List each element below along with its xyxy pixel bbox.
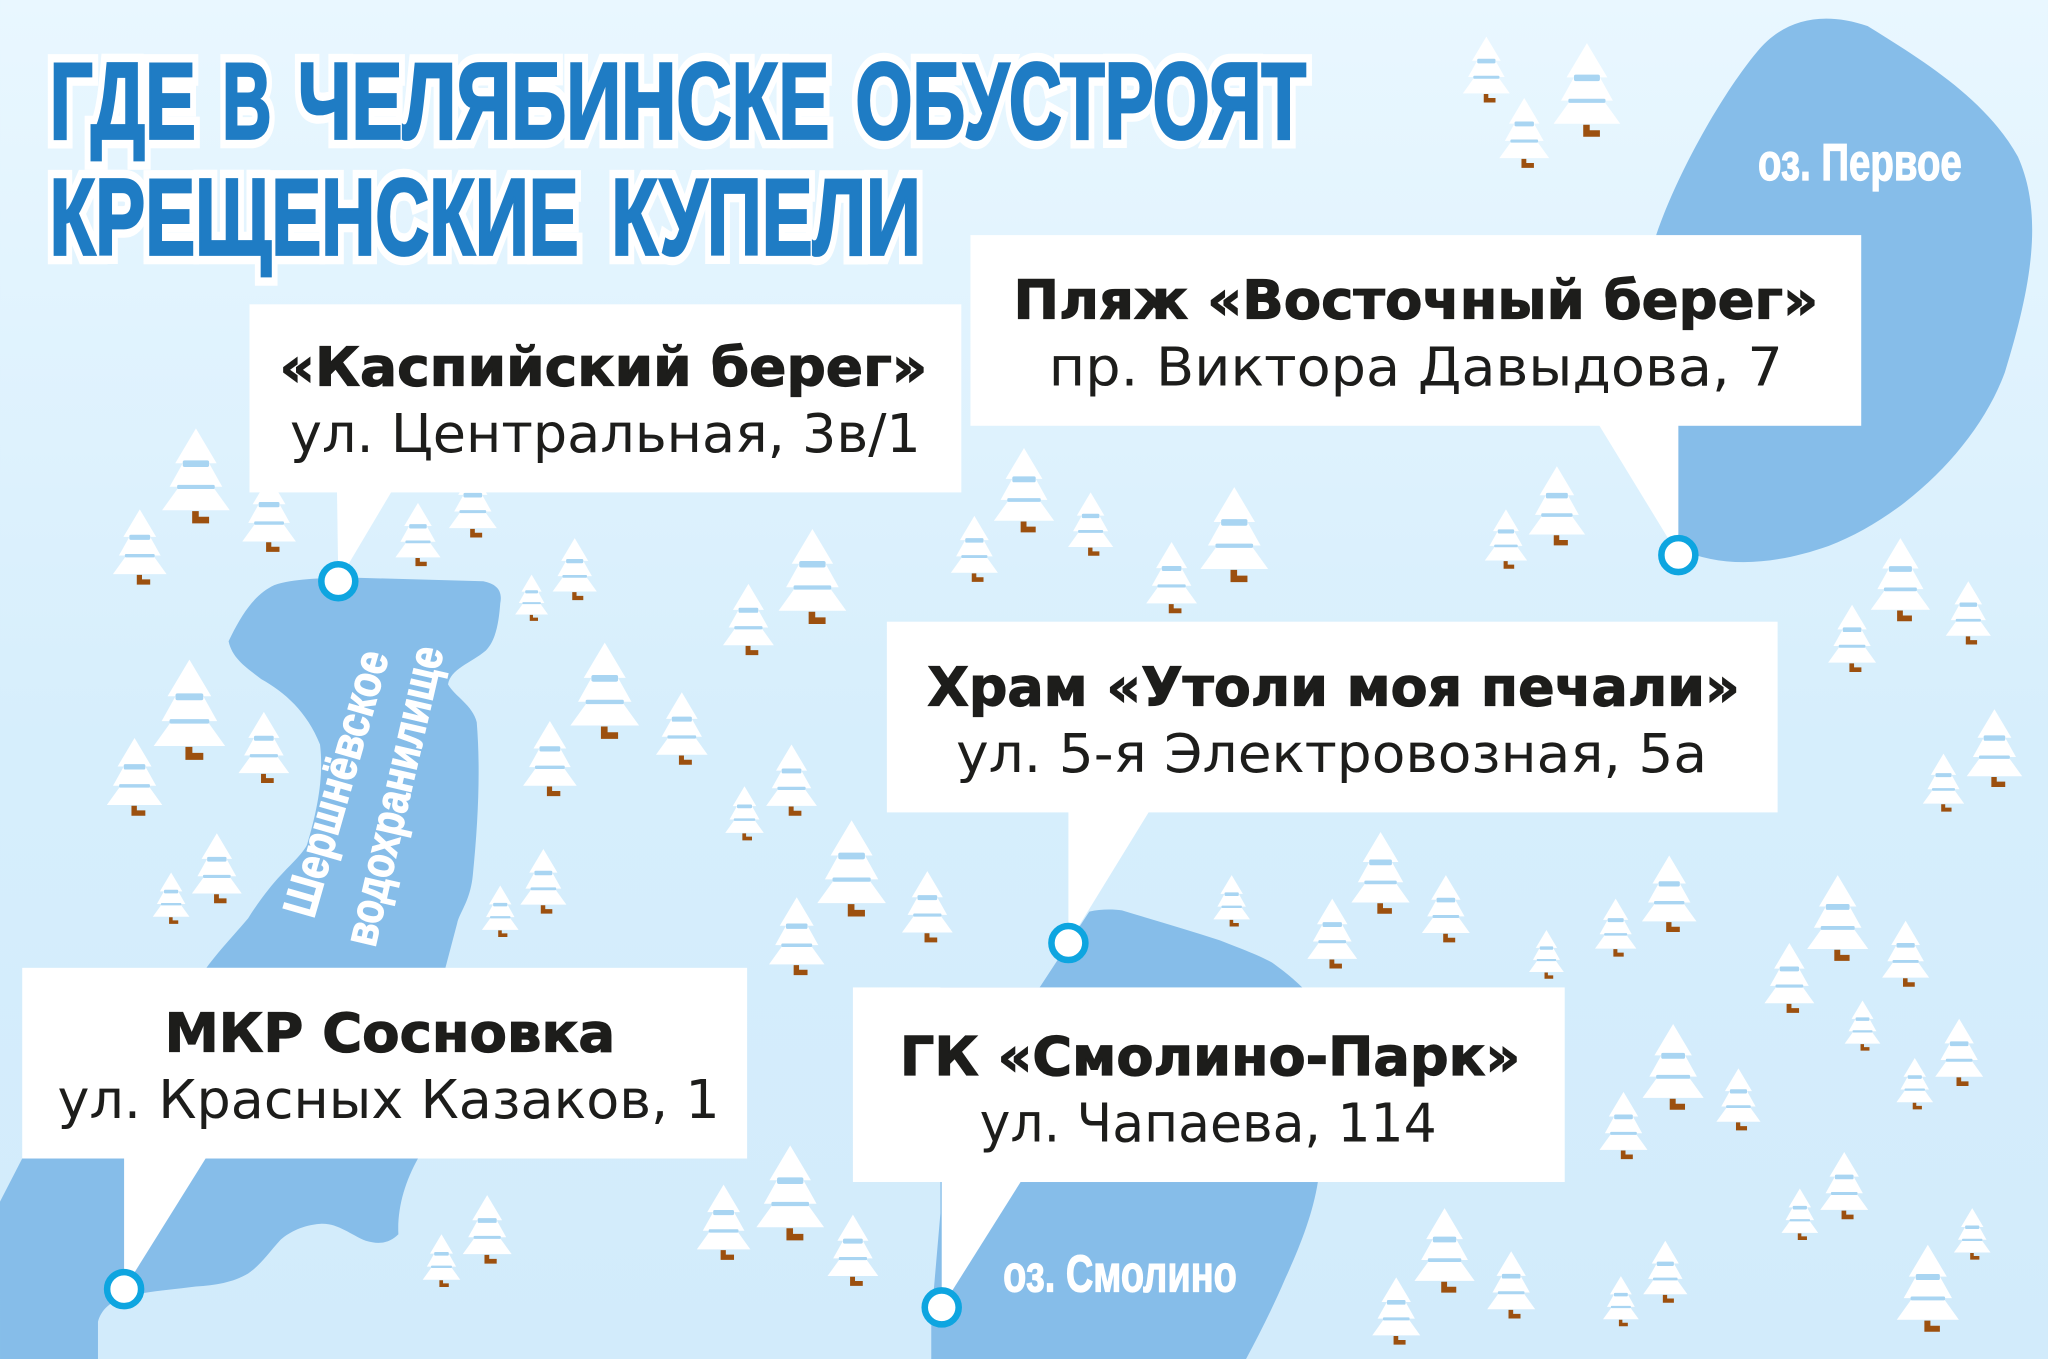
- title: ОБУСТРОЯТ: [856, 40, 1306, 161]
- title: КУПЕЛИ: [611, 157, 921, 278]
- callout: Восточный берег: Пляж «Восточный берег»: [1014, 269, 1818, 332]
- callout: МКР Сосновка: ул. Красных Казаков, 1: [57, 1068, 720, 1131]
- reservoir: southern part: [0, 1159, 418, 1359]
- callout: Восточный берег: пр. Виктора Давыдова, 7: [1049, 335, 1783, 398]
- callout: Каспийский берег: ул. Центральная, 3в/1: [290, 402, 921, 465]
- lake label: оз. Первое: оз. Первое: [1758, 134, 1962, 192]
- title: ЧЕЛЯБИНСКЕ: [298, 40, 829, 161]
- callout: Утоли моя печали: [887, 622, 1778, 960]
- lake: Смолино: [931, 909, 1318, 1359]
- title: ЧЕЛЯБИНСКЕ: [298, 40, 829, 161]
- callout: Смолино-Парк: ул. Чапаева, 114: [980, 1092, 1437, 1155]
- callout: МКР Сосновка: МКР Сосновка: [165, 1001, 615, 1064]
- lake: Первое: [1656, 19, 2032, 562]
- title: В: [222, 40, 272, 161]
- callout: МКР Сосновка: [22, 968, 747, 1306]
- title: ГДЕ: [50, 40, 196, 161]
- callout: Смолино-Парк: [853, 987, 1565, 1324]
- title: ГДЕ: [50, 40, 196, 161]
- callout: Утоли моя печали: Храм «Утоли моя печали»: [927, 655, 1740, 718]
- title: В: [222, 40, 272, 161]
- callout: Восточный берег: [970, 235, 1861, 572]
- reservoir label: водохранилище: [333, 641, 453, 950]
- title: [50, 40, 1306, 278]
- title: КРЕЩЕНСКИЕ: [50, 157, 579, 278]
- callout: Утоли моя печали: ул. 5-я Электровозная, 5а: [956, 722, 1707, 785]
- callout: Каспийский берег: [249, 304, 961, 598]
- reservoir label: [272, 641, 453, 950]
- callout: Каспийский берег: «Каспийский берег»: [280, 335, 927, 398]
- lake label: оз. Смолино: оз. Смолино: [1003, 1246, 1237, 1304]
- title: КРЕЩЕНСКИЕ: [50, 157, 579, 278]
- reservoir label: Шершнёвское: [272, 644, 399, 922]
- callout: Смолино-Парк: ГК «Смолино-Парк»: [900, 1025, 1520, 1088]
- title: ОБУСТРОЯТ: [856, 40, 1306, 161]
- title: КУПЕЛИ: [611, 157, 921, 278]
- reservoir: Шершнёвское: [206, 577, 501, 968]
